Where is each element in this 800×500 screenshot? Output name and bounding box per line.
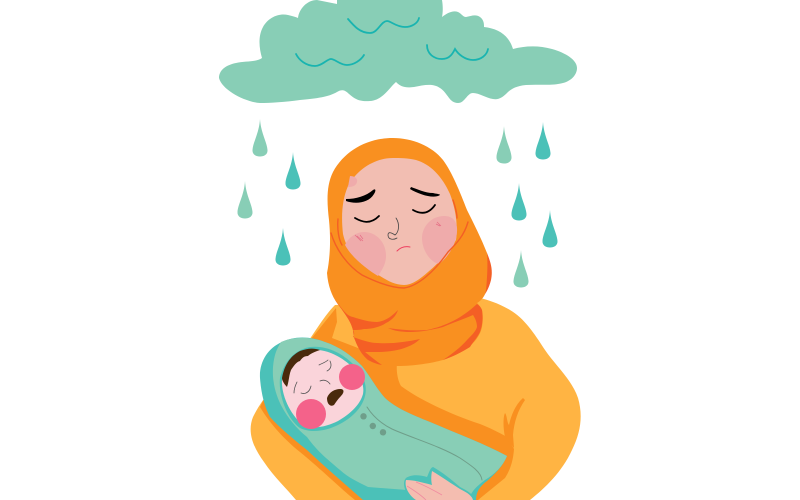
baby eyes and brows [294,360,331,394]
left eye [355,216,379,222]
scarf main [327,138,487,366]
cloud squiggle 3 [427,45,488,60]
cloud squiggle 1 [348,18,419,33]
sweater inner fold: orange shadow [260,308,514,500]
raindrops [237,119,558,288]
baby bundle [260,338,507,500]
cheek marks [355,222,441,241]
cheek left [345,232,386,276]
hijab and scarf [327,138,492,366]
baby face [282,350,363,427]
face [342,158,457,285]
mother's hand [404,467,475,500]
blanket seam [367,407,482,480]
right eyebrow [410,187,440,197]
face teal ring [280,347,366,431]
blanket teal edge [260,338,507,500]
scarf fold: right [388,304,483,360]
baby hair [282,349,320,387]
scarf shadow [470,253,492,300]
scarf fold: left and lower [335,300,420,365]
hijab inner line [331,200,468,288]
forehead blush [348,176,357,187]
cloud squiggle 2 [296,54,364,66]
cloud [219,0,577,103]
mouth [397,247,410,251]
baby mouth [327,389,344,406]
mother's sweater body [251,298,581,500]
baby cheek right [339,364,365,390]
baby cheek left [296,399,326,429]
cheek right [422,216,457,264]
nose [388,218,399,239]
right eye [413,205,435,213]
sleeve crease [504,398,525,448]
left eyebrow [346,189,375,203]
blanket mint [273,338,507,496]
blanket buttons [360,413,386,435]
